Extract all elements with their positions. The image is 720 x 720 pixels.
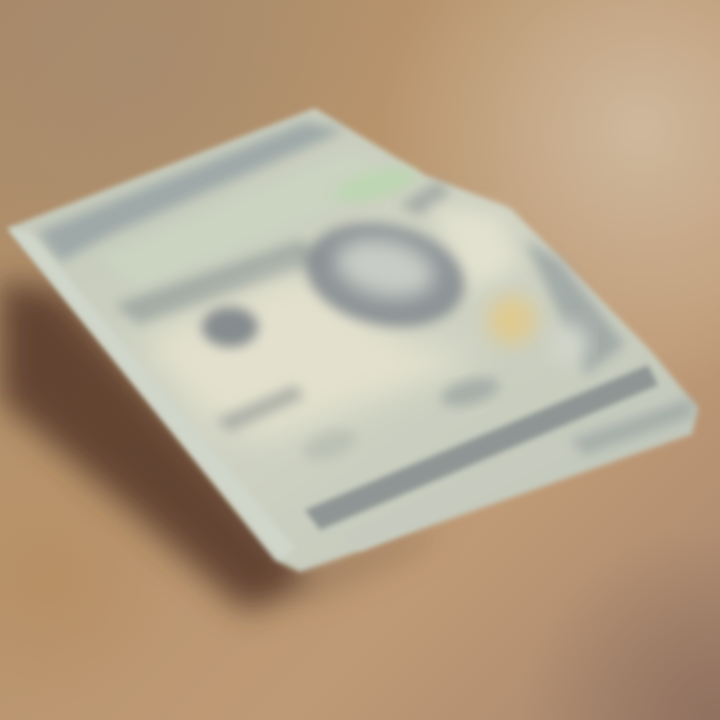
upper pale band [100, 150, 400, 290]
shadow under the banknotes [0, 280, 440, 612]
small ovals [438, 373, 502, 411]
stack body [8, 108, 698, 572]
portrait medallion [296, 209, 474, 341]
lower pale band [340, 395, 685, 550]
top border stripe [38, 122, 345, 262]
central pale field [140, 270, 480, 440]
left lower gray line [215, 385, 305, 432]
small seal [202, 307, 258, 347]
right side ornament [525, 240, 625, 375]
green tint [331, 162, 419, 208]
yellow mark [488, 296, 536, 344]
left bright edge [8, 228, 295, 560]
mid gray band [115, 240, 330, 325]
banknote stack [8, 108, 698, 572]
edge stripe [570, 398, 695, 455]
lower dark stripe [305, 365, 658, 530]
